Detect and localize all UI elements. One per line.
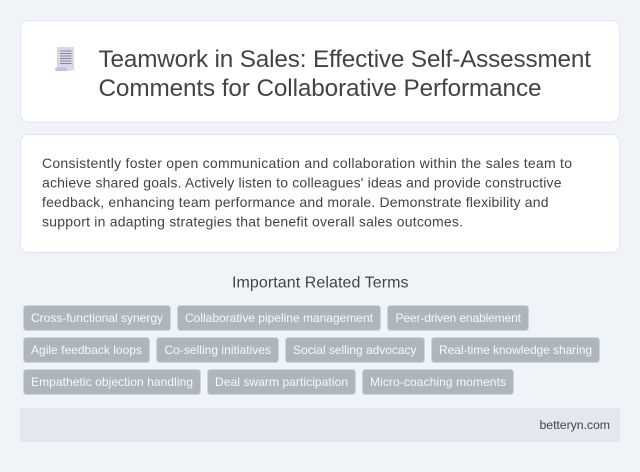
- tag list: [24, 306, 600, 394]
- tag: agile feedback loops: Agile feedback loops: [31, 343, 142, 357]
- panel: title header: [20, 20, 620, 122]
- heading: important related terms: Important Related Terms: [232, 274, 408, 292]
- tag: cross-functional synergy: [24, 306, 170, 330]
- panel: summary paragraph: [20, 134, 620, 252]
- tag: peer-driven enablement: [388, 306, 528, 330]
- icon: paper scroll: [55, 47, 74, 71]
- tag: real-time knowledge sharing: [432, 338, 600, 362]
- tag: deal swarm participation: Deal swarm participation: [215, 375, 348, 389]
- tag: empathetic objection handling: Empathetic objection handling: [31, 375, 193, 389]
- paragraph text: [42, 155, 572, 230]
- tag: deal swarm participation: [208, 370, 356, 394]
- tag: micro-coaching moments: [362, 370, 514, 394]
- tag: real-time knowledge sharing: Real-time knowledge sharing: [439, 343, 592, 357]
- tag: collaborative pipeline management: Collaborative pipeline management: [185, 311, 374, 325]
- tag: co-selling initiatives: [156, 338, 278, 362]
- title text: [98, 46, 591, 102]
- paragraph text: support in adapting strategies that benefit overall sales outcomes.: [42, 214, 463, 230]
- tag: social selling advocacy: Social selling advocacy: [293, 343, 416, 357]
- tag: cross-functional synergy: Cross-functional synergy: [31, 311, 163, 325]
- tag: peer-driven enablement: Peer-driven enablement: [396, 311, 522, 325]
- tag: social selling advocacy: [286, 338, 424, 362]
- tag: co-selling initiatives: Co-selling initiatives: [164, 343, 271, 357]
- title text: Comments for Collaborative Performance: [98, 75, 542, 102]
- title text: Teamwork in Sales: Effective Self-Assessment: [98, 46, 591, 73]
- paragraph text: feedback, enhancing team performance and morale. Demonstrate flexibility and: [42, 194, 548, 210]
- tag: collaborative pipeline management: [178, 306, 380, 330]
- footer site name: betteryn.com: [540, 418, 610, 432]
- footer bar: [20, 408, 620, 442]
- tag: micro-coaching moments: Micro-coaching moments: [370, 375, 506, 389]
- paragraph text: Consistently foster open communication and collaboration within the sales team to: [42, 155, 572, 171]
- tag: agile feedback loops: [24, 338, 150, 362]
- paragraph text: achieve shared goals. Actively listen to colleagues' ideas and provide constructive: [42, 174, 562, 190]
- tag: empathetic objection handling: [24, 370, 200, 394]
